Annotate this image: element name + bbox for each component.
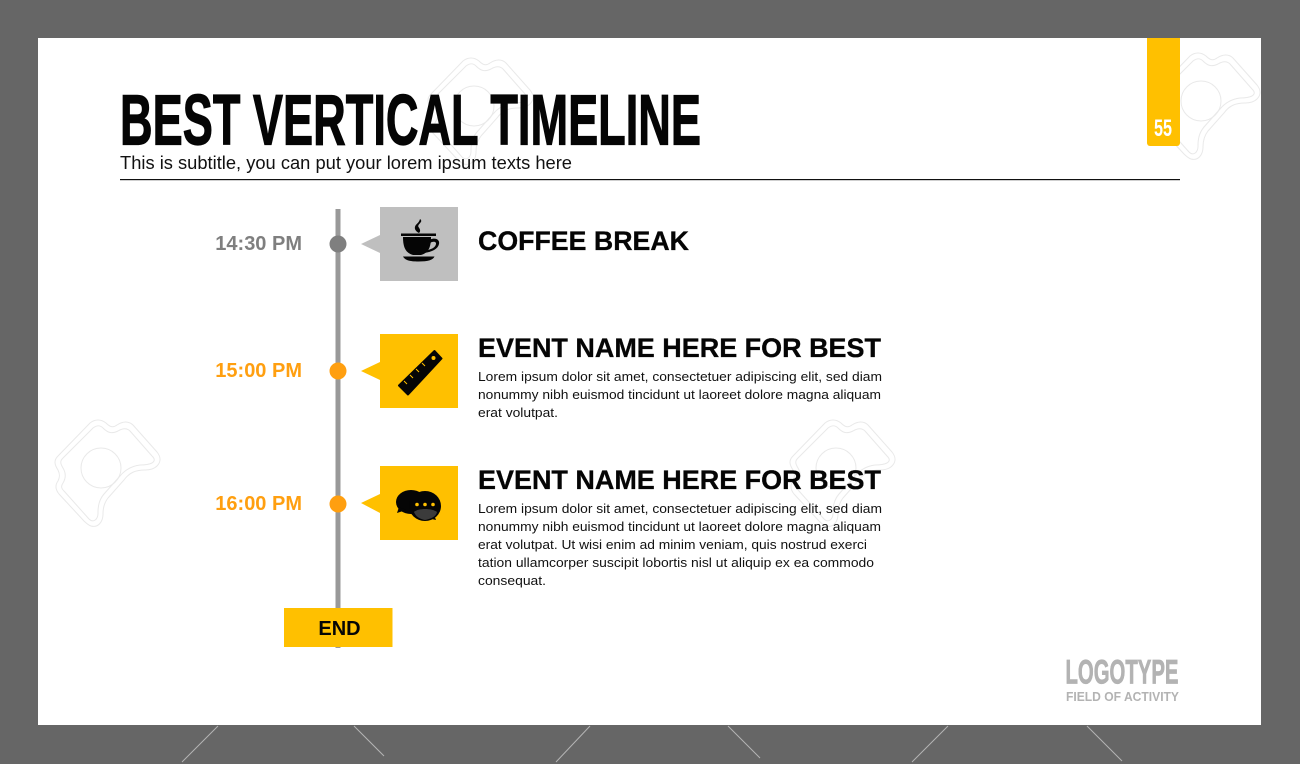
- logotype: LOGOTYPE: [1066, 654, 1178, 692]
- event: 15:00: [215, 333, 882, 420]
- icon box: [361, 207, 458, 281]
- time label: 15:00 PM: [215, 360, 302, 382]
- time label: 16:00 PM: [215, 493, 302, 515]
- event description: erat volutpat. Ut wisi enim ad minim veniam, quis nostrud exerci: [478, 537, 867, 552]
- event heading: EVENT NAME HERE FOR BEST: [478, 333, 881, 363]
- event description: consequat.: [478, 573, 546, 588]
- logotype: FIELD OF ACTIVITY: [1066, 690, 1180, 704]
- event description: tation ullamcorper suscipit lobortis nisl ut aliquip ex ea commodo: [478, 555, 874, 570]
- title: BEST VERTICAL TIMELINE: [120, 82, 701, 160]
- icon box: [361, 334, 458, 408]
- timeline vertical line: [336, 209, 340, 648]
- event description: [478, 369, 882, 420]
- event description: erat volutpat.: [478, 405, 558, 420]
- event description: Lorem ipsum dolor sit amet, consectetuer adipiscing elit, sed diam: [478, 501, 882, 516]
- event heading: EVENT NAME HERE FOR BEST: [478, 465, 881, 495]
- icon: chat bubbles: [396, 490, 441, 521]
- event description: Lorem ipsum dolor sit amet, consectetuer adipiscing elit, sed diam: [478, 369, 882, 384]
- end marker: [284, 608, 392, 647]
- event description: nonummy nibh euismod tincidunt ut laoreet dolore magna aliquam: [478, 519, 881, 534]
- timeline marker: [330, 236, 346, 252]
- time label: 14:30 PM: [215, 233, 302, 255]
- header rule: [120, 179, 1180, 180]
- page number tab: 55: [1154, 115, 1172, 142]
- icon: coffee cup: [401, 219, 439, 262]
- end marker: END: [318, 618, 361, 640]
- subtitle: This is subtitle, you can put your lorem ipsum texts here: [120, 153, 572, 173]
- logotype: [1066, 654, 1180, 704]
- event heading: COFFEE BREAK: [478, 226, 689, 256]
- timeline marker: [330, 362, 346, 380]
- page number tab: [1147, 38, 1180, 146]
- event description: nonummy nibh euismod tincidunt ut laoreet dolore magna aliquam: [478, 387, 881, 402]
- timeline marker: [330, 496, 346, 512]
- event: 16:00: [215, 465, 882, 588]
- event: coffee break: [215, 207, 689, 281]
- icon box: [361, 466, 458, 540]
- event description: [478, 501, 882, 588]
- icon: ruler: [399, 351, 442, 394]
